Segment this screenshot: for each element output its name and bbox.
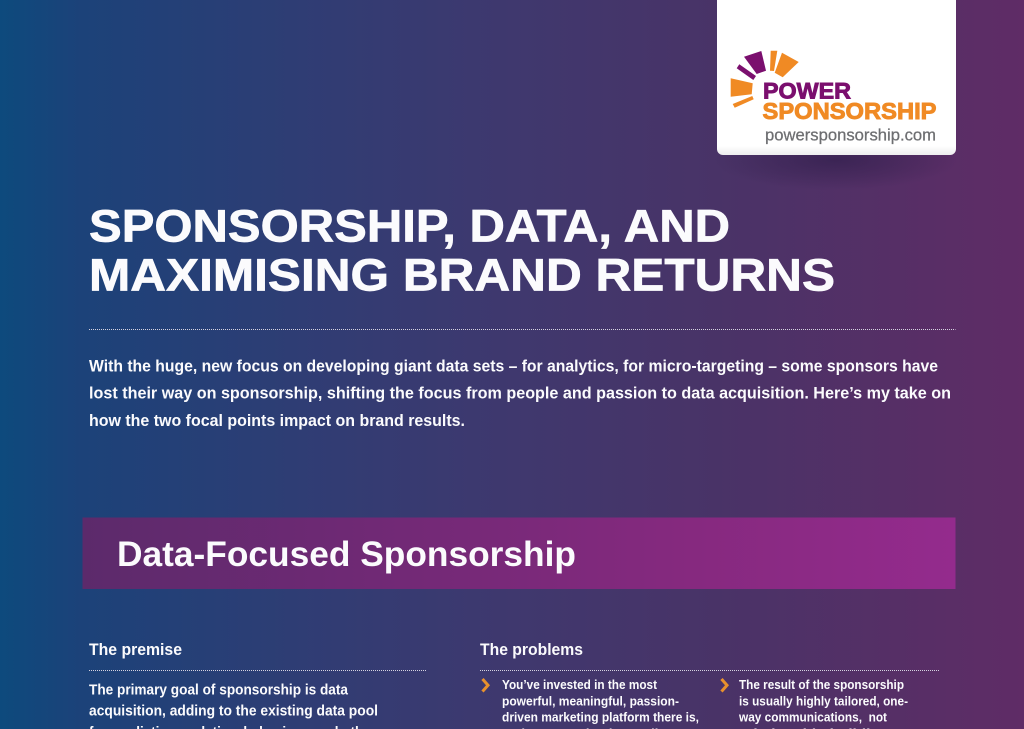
- section heading: Data-Focused Sponsorship: [117, 535, 576, 574]
- section banner: [82, 518, 956, 589]
- logo card: [714, 0, 958, 190]
- icon: logo sunburst: [731, 51, 799, 108]
- problems heading: The problems: [480, 641, 583, 659]
- premise heading: The premise: [89, 641, 182, 659]
- problem item two: The result of the sponsorship: [739, 677, 904, 692]
- problem item one: driven marketing platform there is,: [502, 710, 699, 725]
- premise text: acquisition, adding to the existing data pool: [89, 702, 378, 720]
- intro text: lost their way on sponsorship, shifting the focus from people and passion to data acquisition. Here’s my take on: [89, 384, 951, 402]
- problem item two: is usually highly tailored, one-: [739, 693, 908, 708]
- problem item one: You’ve invested in the most: [502, 677, 658, 692]
- logo wordmark: POWER: [763, 79, 851, 104]
- problem item one: powerful, meaningful, passion-: [502, 693, 679, 708]
- panel: the premise: [89, 641, 426, 729]
- title: [89, 201, 835, 300]
- intro text: [89, 358, 951, 430]
- logo wordmark: SPONSORSHIP: [762, 98, 936, 124]
- premise text: The primary goal of sponsorship is data: [89, 682, 349, 698]
- logo wordmark: [762, 79, 936, 124]
- title: MAXIMISING BRAND RETURNS: [89, 249, 835, 300]
- title: SPONSORSHIP, DATA, AND: [89, 201, 730, 252]
- premise text: [89, 682, 378, 729]
- intro text: With the huge, new focus on developing giant data sets – for analytics, for micro-targeting – some sponsors have: [89, 358, 938, 376]
- icon: orange chevron: [482, 679, 488, 692]
- panel: the problems: [480, 641, 939, 729]
- intro text: how the two focal points impact on brand results.: [89, 412, 465, 430]
- problem item two: way communications, not: [738, 710, 888, 725]
- logo url: powersponsorship.com: [765, 127, 936, 145]
- problem item two: [722, 677, 908, 729]
- problem item one: [482, 677, 699, 729]
- icon: orange chevron: [722, 679, 727, 692]
